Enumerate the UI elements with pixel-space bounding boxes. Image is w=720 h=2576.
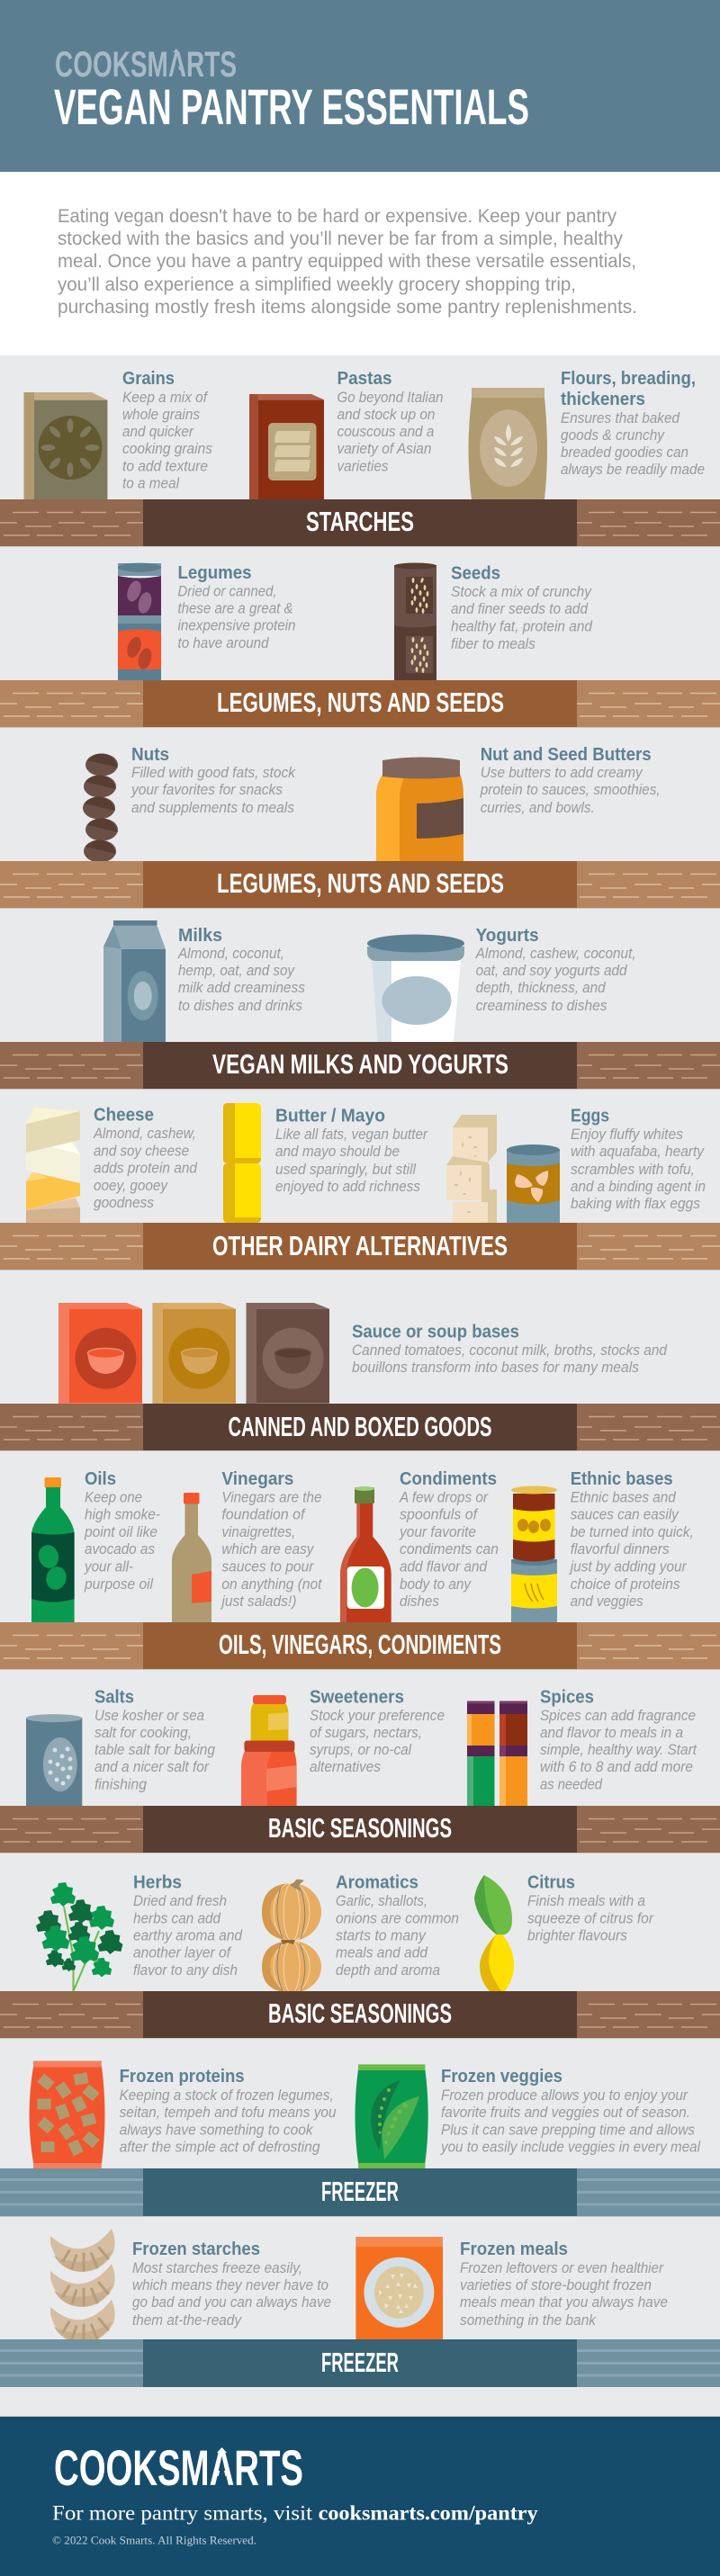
heading: legumes: Legumes xyxy=(178,562,252,583)
shelf: legumes, nuts and seeds xyxy=(0,861,720,909)
description: butter / mayo: and mayo should be xyxy=(275,1144,400,1160)
description: legumes: these are a great & xyxy=(178,601,293,617)
description: milks: milk add creaminess xyxy=(178,980,305,996)
description: spices: and flavor to meals in a xyxy=(540,1725,683,1741)
description: frozen meals: Frozen leftovers or even healthier xyxy=(460,2260,664,2276)
panel: sweeteners xyxy=(241,1686,445,1806)
header banner xyxy=(0,0,720,172)
panel: eggs xyxy=(446,1105,706,1223)
description: butter / mayo: used sparingly, but still xyxy=(275,1162,417,1178)
description: aromatics: depth and aroma xyxy=(336,1962,440,1979)
heading: aromatics: Aromatics xyxy=(336,1872,418,1893)
shelf label: FREEZER xyxy=(321,2347,399,2378)
description: pastas: and stock up on xyxy=(337,407,436,423)
description: legumes: to have around xyxy=(178,635,269,651)
panel: ethnic bases xyxy=(511,1468,694,1622)
description: vinegars: which are easy xyxy=(221,1541,315,1557)
description: sweeteners: Stock your preference xyxy=(310,1708,445,1724)
description: pastas: variety of Asian xyxy=(337,441,432,457)
description: flours: Ensures that baked xyxy=(561,410,680,426)
description: nut and seed butters: Use butters to add creamy xyxy=(481,765,644,781)
description: grains: and quicker xyxy=(122,424,194,440)
description: condiments: body to any xyxy=(400,1576,472,1593)
description: salts: salt for cooking, xyxy=(94,1725,192,1741)
logo: Cook Smarts: COOKSMARTS xyxy=(55,45,237,85)
description: butter / mayo: Like all fats, vegan butter xyxy=(275,1126,428,1143)
description: frozen meals: something in the bank xyxy=(460,2312,597,2329)
description: ethnic bases: Ethnic bases and xyxy=(571,1489,676,1505)
icon: lime and lemon xyxy=(474,1875,514,1992)
description: seeds: Stock a mix of crunchy xyxy=(451,584,593,600)
description: aromatics: Garlic, shallots, xyxy=(336,1893,428,1909)
description: vinegars: sauces to pour xyxy=(221,1558,315,1575)
description: oils: point oil like xyxy=(84,1524,158,1540)
description: eggs: with aquafaba, hearty xyxy=(571,1144,706,1160)
heading: oils: Oils xyxy=(85,1468,116,1489)
description: salts: Use kosher or sea xyxy=(94,1708,204,1724)
heading: seeds: Seeds xyxy=(451,563,500,584)
shelf: basic seasonings xyxy=(0,1991,720,2039)
description: frozen proteins xyxy=(120,2087,337,2156)
description: citrus xyxy=(527,1893,654,1943)
description: pastas: Go beyond Italian xyxy=(337,390,443,406)
description: pastas xyxy=(337,390,443,475)
description: citrus: brighter flavours xyxy=(527,1927,627,1943)
shelf: vegan milks and yogurts xyxy=(0,1042,720,1090)
description: yogurts: oat, and soy yogurts add xyxy=(476,963,627,979)
description: pastas: varieties xyxy=(337,459,389,475)
description: flours xyxy=(561,410,705,478)
icon: seed jars xyxy=(394,563,436,680)
description: frozen meals xyxy=(460,2260,668,2329)
icon: legume cans xyxy=(118,563,161,680)
description: herbs: flavor to any dish xyxy=(133,1962,238,1979)
heading: salts: Salts xyxy=(94,1686,134,1707)
description: vinegars: on anything (not xyxy=(221,1576,323,1593)
description: oils: your all- xyxy=(84,1558,133,1575)
icon: oil bottle xyxy=(32,1477,75,1622)
description: herbs: another layer of xyxy=(133,1945,232,1961)
description: seeds xyxy=(451,584,593,652)
description: spices: as needed xyxy=(540,1776,603,1792)
shelf label: BASIC SEASONINGS xyxy=(268,1812,452,1844)
icon: butter sticks xyxy=(223,1103,261,1223)
description: grains: to add texture xyxy=(122,459,208,475)
description: legumes xyxy=(178,583,295,651)
description: sauce or soup bases: Canned tomatoes, coconut milk, broths, stocks and xyxy=(352,1342,668,1359)
intro text: purchasing mostly fresh items alongside some pantry replenishments. xyxy=(58,297,637,318)
panel: nuts xyxy=(83,744,296,862)
description: pastas: couscous and a xyxy=(337,424,434,440)
description: condiments xyxy=(399,1489,499,1610)
description: nuts: and supplements to meals xyxy=(131,800,294,816)
panel: aromatics xyxy=(262,1872,459,1993)
shelf: starches xyxy=(0,499,720,547)
description: spices: Spices can add fragrance xyxy=(540,1708,696,1724)
description: vinegars xyxy=(220,1489,323,1610)
description: flours: breaded goodies can xyxy=(561,444,688,461)
description: sauce or soup bases: bouillons transform into bases for many meals xyxy=(352,1360,639,1376)
heading: condiments: Condiments xyxy=(400,1468,497,1489)
heading: cheese: Cheese xyxy=(94,1105,154,1126)
description: oils: high smoke- xyxy=(85,1507,160,1523)
description: frozen starches: which means they never have to xyxy=(132,2277,328,2293)
description: aromatics: starts to many xyxy=(336,1927,428,1943)
heading: vinegars: Vinegars xyxy=(221,1468,293,1489)
heading: sweeteners: Sweeteners xyxy=(310,1686,404,1707)
shelf label: VEGAN MILKS AND YOGURTS xyxy=(212,1048,508,1080)
panel: spices xyxy=(467,1686,698,1806)
description: butter / mayo xyxy=(275,1126,428,1195)
description: vinegars: foundation of xyxy=(221,1507,307,1523)
heading: spices: Spices xyxy=(540,1686,594,1707)
description: milks xyxy=(177,946,305,1014)
panel: butter / mayo xyxy=(223,1103,428,1223)
panel: legumes xyxy=(118,562,295,680)
description: cheese: Almond, cashew, xyxy=(93,1126,196,1142)
description: nut and seed butters xyxy=(480,765,661,816)
description: nut and seed butters: protein to sauces, smoothies, xyxy=(480,782,661,798)
icon: onions xyxy=(262,1880,321,1993)
icon: three boxes xyxy=(58,1303,329,1404)
description: frozen meals: varieties of store-bought frozen xyxy=(460,2277,652,2293)
description: spices: simple, healthy way. Start xyxy=(540,1742,698,1758)
description: vinegars: just salads!) xyxy=(220,1593,296,1610)
heading: citrus: Citrus xyxy=(527,1872,575,1893)
description: herbs: Dried and fresh xyxy=(133,1893,227,1909)
footer logo: COOKSMARTS xyxy=(54,2439,303,2496)
description: vinegars: Vinegars are the xyxy=(221,1489,321,1505)
shelf: canned and boxed goods xyxy=(0,1404,720,1451)
description: cheese: adds protein and xyxy=(94,1161,198,1177)
panel: milks xyxy=(104,920,305,1042)
description: sweeteners: syrups, or no-cal xyxy=(310,1742,412,1758)
description: frozen veggies: Frozen produce allows you to enjoy your xyxy=(441,2087,688,2104)
description: ethnic bases xyxy=(569,1489,694,1610)
description: herbs: herbs can add xyxy=(133,1910,221,1926)
description: salts: finishing xyxy=(94,1776,148,1792)
description: frozen veggies: Plus it can save prepping time and allows xyxy=(441,2122,695,2138)
heading: nut and seed butters: Nut and Seed Butters xyxy=(481,744,652,765)
description: aromatics: meals and add xyxy=(336,1945,428,1961)
description: grains: Keep a mix of xyxy=(122,390,209,406)
description: frozen veggies xyxy=(440,2087,701,2156)
heading: nuts: Nuts xyxy=(131,744,169,765)
shelf: other dairy alternatives xyxy=(0,1223,720,1270)
intro text: Eating vegan doesn't have to be hard or expensive. Keep your pantry xyxy=(58,206,616,227)
shelf label: STARCHES xyxy=(306,506,414,537)
panel: cheese xyxy=(26,1105,198,1223)
description: ethnic bases: just by adding your xyxy=(569,1558,688,1575)
footer link text: cooksmarts.com/pantry xyxy=(319,2502,538,2525)
description: oils: avocado as xyxy=(85,1541,155,1557)
description: eggs xyxy=(571,1126,706,1212)
description: cheese: ooey, gooey xyxy=(94,1178,169,1194)
heading: milks: Milks xyxy=(178,925,222,946)
description: cheese: and soy cheese xyxy=(94,1143,189,1159)
description: herbs: earthy aroma and xyxy=(133,1927,243,1943)
description: cheese: goodness xyxy=(94,1195,154,1211)
heading: sauce or soup bases: Sauce or soup bases xyxy=(352,1321,519,1342)
description: frozen starches xyxy=(132,2260,331,2329)
description: salts: and a nicer salt for xyxy=(94,1759,210,1775)
icon: pasta box xyxy=(249,394,324,499)
icon: nut butter jar xyxy=(376,758,464,861)
icon: dumplings xyxy=(50,2229,115,2343)
description: legumes: Dried or canned, xyxy=(178,583,277,599)
description: flours: goods & crunchy xyxy=(561,427,666,444)
description: ethnic bases: flavorful dinners xyxy=(571,1541,670,1557)
footer link text: For more pantry smarts, visit xyxy=(52,2502,313,2525)
description: citrus: Finish meals with a xyxy=(527,1893,645,1909)
description: frozen starches: them at-the-ready xyxy=(132,2312,243,2329)
icon: frozen veggie bag xyxy=(355,2064,428,2168)
description: eggs: and a binding agent in xyxy=(571,1179,706,1195)
description: frozen starches: Most starches freeze easily, xyxy=(132,2260,302,2276)
description: nuts: Filled with good fats, stock xyxy=(131,765,296,781)
heading: flours: Flours, breading, xyxy=(561,368,696,389)
description: ethnic bases: and veggies xyxy=(571,1593,644,1610)
description: grains xyxy=(122,390,212,492)
panel: vinegars xyxy=(172,1468,323,1622)
icon: hot sauce bottle xyxy=(340,1486,392,1622)
description: grains: cooking grains xyxy=(122,441,212,457)
panel: flours xyxy=(468,368,705,499)
description: cheese xyxy=(93,1126,198,1211)
icon: salt shaker xyxy=(26,1714,82,1806)
description: frozen proteins: after the simple act of defrosting xyxy=(120,2140,320,2156)
description: milks: hemp, oat, and soy xyxy=(178,963,296,979)
heading: frozen proteins: Frozen proteins xyxy=(120,2066,245,2087)
description: yogurts: depth, thickness, and xyxy=(476,980,606,996)
description: ethnic bases: sauces can easily xyxy=(571,1507,680,1523)
description: oils: Keep one xyxy=(85,1489,142,1505)
shelf label: OILS, VINEGARS, CONDIMENTS xyxy=(219,1629,501,1660)
icon: sauce jars xyxy=(511,1486,557,1622)
description: frozen veggies: you to easily include veggies in every meal xyxy=(440,2140,701,2156)
description: nuts: your favorites for snacks xyxy=(130,782,283,798)
description: yogurts: creaminess to dishes xyxy=(476,998,608,1014)
description: condiments: spoonfuls of xyxy=(400,1507,479,1523)
panel: frozen veggies xyxy=(355,2064,701,2168)
icon: frozen meal box xyxy=(356,2237,443,2340)
icon: frozen protein bag xyxy=(29,2060,104,2168)
shelf label: LEGUMES, NUTS AND SEEDS xyxy=(217,867,504,899)
description: frozen starches: go bad and you can always have xyxy=(132,2294,331,2311)
icon: herb sprig xyxy=(36,1882,122,1991)
description: spices: with 6 to 8 and add more xyxy=(540,1759,693,1775)
description: flours: always be readily made xyxy=(561,462,705,478)
icon: grain box xyxy=(23,392,107,499)
description: butter / mayo: enjoyed to add richness xyxy=(275,1179,420,1195)
panel: grains xyxy=(23,368,212,499)
intro text: stocked with the basics and you’ll never be far from a simple, healthy xyxy=(58,229,623,249)
heading: herbs: Herbs xyxy=(133,1872,182,1893)
icon: vinegar bottle xyxy=(172,1493,212,1622)
description: nut and seed butters: curries, and bowls. xyxy=(481,800,595,816)
description: milks: to dishes and drinks xyxy=(178,998,302,1014)
panel: sauce or soup bases xyxy=(58,1303,668,1404)
description: legumes: inexpensive protein xyxy=(178,618,295,634)
shelf: legumes, nuts and seeds xyxy=(0,680,720,728)
panel: salts xyxy=(26,1686,216,1806)
description: sweeteners xyxy=(310,1708,445,1775)
description: seeds: healthy fat, protein and xyxy=(451,618,593,634)
description: grains: whole grains xyxy=(122,407,200,423)
description: frozen proteins: Keeping a stock of frozen legumes, xyxy=(120,2087,334,2104)
description: ethnic bases: be turned into quick, xyxy=(571,1524,694,1540)
intro text: you’ll also experience a simplified weekly grocery shopping trip, xyxy=(58,274,576,295)
description: citrus: squeeze of citrus for xyxy=(527,1910,654,1926)
heading: frozen meals: Frozen meals xyxy=(460,2239,568,2259)
description: condiments: A few drops or xyxy=(399,1489,489,1505)
description: salts xyxy=(94,1708,216,1792)
heading: flours: thickeners xyxy=(561,389,645,409)
panel: nut and seed butters xyxy=(376,744,661,861)
heading: yogurts: Yogurts xyxy=(476,925,539,946)
intro text xyxy=(0,172,720,355)
panel: frozen meals xyxy=(356,2237,668,2340)
icon: tofu and chickpeas xyxy=(446,1115,560,1223)
description: grains: to a meal xyxy=(122,476,180,492)
description: yogurts xyxy=(475,946,636,1014)
shelf: oils, vinegars, condiments xyxy=(0,1622,720,1670)
shelf: freezer xyxy=(0,2339,720,2387)
copyright: © 2022 Cook Smarts. All Rights Reserved. xyxy=(52,2534,256,2546)
description: vinegars: vinaigrettes, xyxy=(221,1524,295,1540)
description: spices xyxy=(540,1708,698,1792)
description: seeds: fiber to meals xyxy=(451,636,536,652)
heading: butter / mayo: Butter / Mayo xyxy=(275,1105,385,1126)
icon: cheese stack xyxy=(26,1108,80,1223)
heading: flours xyxy=(561,368,696,409)
description: eggs: scrambles with tofu, xyxy=(571,1162,695,1178)
description: herbs xyxy=(133,1893,243,1979)
description: condiments: condiments can xyxy=(400,1541,499,1557)
shelf: basic seasonings xyxy=(0,1806,720,1853)
description: eggs: baking with flax eggs xyxy=(571,1196,700,1212)
description: frozen proteins: seitan, tempeh and tofu means you xyxy=(120,2105,337,2121)
description: sweeteners: of sugars, nectars, xyxy=(310,1725,422,1741)
panel: citrus xyxy=(474,1872,654,1992)
icon: milk carton xyxy=(104,920,166,1042)
intro text: meal. Once you have a pantry equipped with these versatile essentials, xyxy=(58,251,636,272)
panel: frozen starches xyxy=(50,2229,331,2343)
panel: pastas xyxy=(249,368,443,499)
shelf label: BASIC SEASONINGS xyxy=(268,1997,452,2029)
description: aromatics xyxy=(336,1893,459,1979)
footer xyxy=(0,2416,720,2576)
description: seeds: and finer seeds to add xyxy=(451,601,589,617)
heading: ethnic bases: Ethnic bases xyxy=(571,1468,673,1489)
heading: eggs: Eggs xyxy=(571,1105,609,1126)
heading: grains: Grains xyxy=(122,368,175,389)
heading: pastas: Pastas xyxy=(337,368,392,389)
description: eggs: Enjoy fluffy whites xyxy=(571,1126,683,1143)
shelf label: FREEZER xyxy=(321,2176,399,2207)
panel: frozen proteins xyxy=(29,2060,337,2168)
shelf label: CANNED AND BOXED GOODS xyxy=(229,1411,491,1442)
description: frozen proteins: always have something to cook xyxy=(120,2122,313,2138)
description: sweeteners: alternatives xyxy=(310,1759,381,1775)
panel: condiments xyxy=(340,1468,499,1622)
shelf: freezer xyxy=(0,2168,720,2217)
panel: herbs xyxy=(36,1872,243,1991)
description: aromatics: onions are common xyxy=(336,1910,459,1926)
description: oils: purpose oil xyxy=(84,1576,154,1593)
description: nuts xyxy=(130,765,296,816)
description: frozen meals: meals mean that you always have xyxy=(460,2294,668,2311)
shelf label: OTHER DAIRY ALTERNATIVES xyxy=(212,1230,508,1261)
description: salts: table salt for baking xyxy=(94,1742,216,1758)
icon: yogurt cup xyxy=(367,934,464,1042)
description: condiments: dishes xyxy=(400,1593,439,1610)
shelf label: LEGUMES, NUTS AND SEEDS xyxy=(217,687,504,718)
panel: oils xyxy=(32,1468,160,1622)
icon: syrup bottle xyxy=(241,1695,297,1806)
icon: flour bag xyxy=(468,388,547,499)
panel: yogurts xyxy=(367,925,636,1042)
heading: frozen starches: Frozen starches xyxy=(132,2239,260,2259)
footer link text xyxy=(52,2502,538,2525)
description: condiments: your favorite xyxy=(399,1524,476,1540)
icon: spice jars xyxy=(467,1701,527,1806)
logo: Cook Smarts xyxy=(55,45,237,85)
description: frozen veggies: favorite fruits and veggies out of season. xyxy=(441,2105,690,2121)
description: condiments: add flavor and xyxy=(400,1558,488,1575)
panel: seeds xyxy=(394,563,593,680)
description: sauce or soup bases xyxy=(352,1342,668,1376)
description: ethnic bases: choice of proteins xyxy=(571,1576,680,1593)
description: milks: Almond, coconut, xyxy=(177,946,284,962)
description: yogurts: Almond, cashew, coconut, xyxy=(475,946,636,962)
description: oils xyxy=(84,1489,160,1593)
footer logo xyxy=(54,2439,303,2496)
icon: stacked nuts xyxy=(83,753,118,862)
heading: frozen veggies: Frozen veggies xyxy=(441,2066,562,2087)
